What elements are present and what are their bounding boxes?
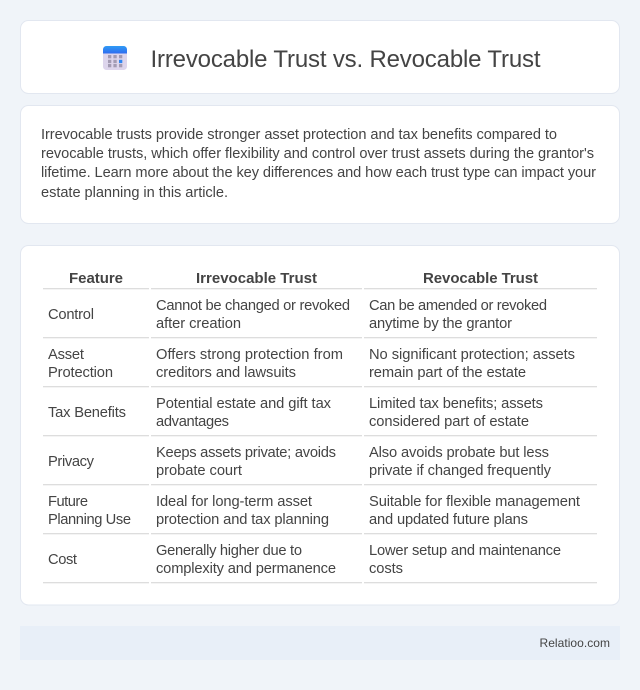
row: future planning use: Planning Use — [48, 512, 131, 528]
row: future planning use: Suitable for flexible management — [369, 494, 580, 510]
row: future planning use: protection and tax planning — [156, 512, 329, 528]
footer — [20, 626, 620, 660]
row: cost: complexity and permanence — [156, 561, 336, 577]
row: tax benefits: Potential estate and gift tax — [156, 396, 332, 412]
text block: introduction: estate planning in this article. — [41, 185, 228, 201]
row: control: anytime by the grantor — [369, 316, 512, 332]
row: control: Can be amended or revoked — [369, 298, 547, 314]
row: control: Cannot be changed or revoked — [156, 298, 350, 314]
row: asset protection: Asset — [48, 347, 84, 363]
row: tax benefits — [48, 396, 543, 430]
row: future planning use: and updated future plans — [369, 512, 528, 528]
row: asset protection — [48, 347, 575, 381]
row: privacy: private if changed frequently — [369, 463, 552, 479]
panel: introduction — [20, 106, 620, 224]
row: control: Control — [48, 307, 94, 323]
footer credit: Relatioo.com — [540, 636, 610, 650]
panel: header — [20, 20, 620, 94]
row: asset protection: Protection — [48, 365, 113, 381]
row: future planning use: Ideal for long-term asset — [156, 494, 312, 510]
row: tax benefits: advantages — [156, 414, 229, 430]
row: cost: Cost — [48, 552, 77, 568]
row: cost: costs — [369, 561, 403, 577]
icon: calendar — [103, 46, 127, 70]
row: tax benefits: considered part of estate — [369, 414, 529, 430]
row: privacy: Privacy — [48, 454, 95, 470]
row: future planning use — [48, 494, 580, 528]
row: asset protection: remain part of the estate — [369, 365, 526, 381]
text block: introduction — [41, 127, 596, 201]
table header row: Revocable Trust — [423, 270, 538, 287]
row: control — [48, 298, 547, 332]
table header row: Irrevocable Trust — [196, 270, 317, 287]
table header row: Feature — [69, 270, 123, 287]
row: privacy: Also avoids probate but less — [369, 445, 549, 461]
row: asset protection: Offers strong protection from — [156, 347, 343, 363]
row: control: after creation — [156, 316, 241, 332]
row: cost: Generally higher due to — [156, 543, 302, 559]
text block: introduction: Irrevocable trusts provide stronger asset protection and tax benefits compared to — [41, 127, 557, 143]
row: cost — [48, 543, 561, 577]
panel: comparison table — [20, 246, 620, 605]
text block: introduction: revocable trusts, which offer flexibility and control over trust assets during the grantor's — [41, 146, 594, 162]
row: privacy — [48, 445, 552, 479]
text block: introduction: lifetime. Learn more about the key differences and how each trust type can impact your — [41, 165, 596, 181]
row: asset protection: creditors and lawsuits — [156, 365, 296, 381]
row: tax benefits: Limited tax benefits; assets — [369, 396, 543, 412]
row: future planning use: Future — [48, 494, 88, 510]
row: privacy: probate court — [156, 463, 242, 479]
table header row — [69, 270, 538, 287]
row: tax benefits: Tax Benefits — [48, 405, 126, 421]
title: Irrevocable Trust vs. Revocable Trust — [150, 46, 541, 73]
row: cost: Lower setup and maintenance — [369, 543, 561, 559]
row: privacy: Keeps assets private; avoids — [156, 445, 336, 461]
row: asset protection: No significant protection; assets — [369, 347, 575, 363]
